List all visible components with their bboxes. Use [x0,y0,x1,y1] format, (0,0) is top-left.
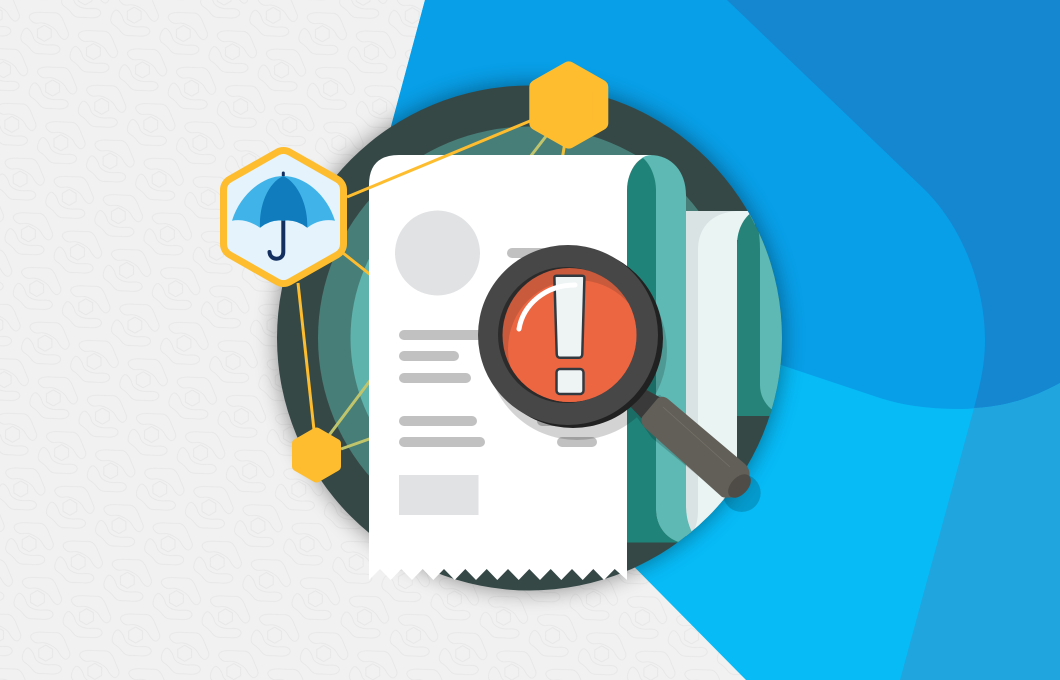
avatar circle [395,210,480,296]
handle [641,397,750,498]
central circular badge [277,86,782,590]
receipt paper [369,155,652,580]
grey box [399,475,478,515]
connector lines over receipt [347,121,530,197]
lens [502,268,636,402]
receipt content placeholders [395,210,597,515]
hexagon node: top [537,70,600,140]
lens highlight [519,285,575,329]
rear paper roll [686,211,782,536]
dark rim [483,248,663,428]
roll light teal [640,155,694,543]
text bars [399,248,597,447]
rear paper highlight [694,211,755,529]
rear roll light teal [758,232,782,410]
lower right blue shape [900,383,1060,680]
umbrella hexagon badge [232,163,335,271]
connector lines behind receipt [298,135,564,449]
rear roll dark teal [737,214,782,416]
inner rim [498,267,634,403]
circle drop shadow [276,84,784,592]
handle end cap [724,470,755,502]
background: blue angular shapes [350,0,1060,680]
grey rim [478,245,658,425]
magnifier shadow [487,260,761,512]
dark blue top right shape [727,0,1060,408]
neck [628,387,665,422]
roll dark teal [627,158,680,542]
rear paper sheet [686,211,755,536]
icon: umbrella [232,173,335,259]
exclamation mark [554,276,584,394]
bright cyan shape [350,0,1060,680]
hexagon node: bottom left [297,432,336,478]
mid blue shape [390,0,1060,409]
magnifying glass [478,245,761,512]
front paper roll [627,155,694,543]
handle highlight [663,407,730,467]
